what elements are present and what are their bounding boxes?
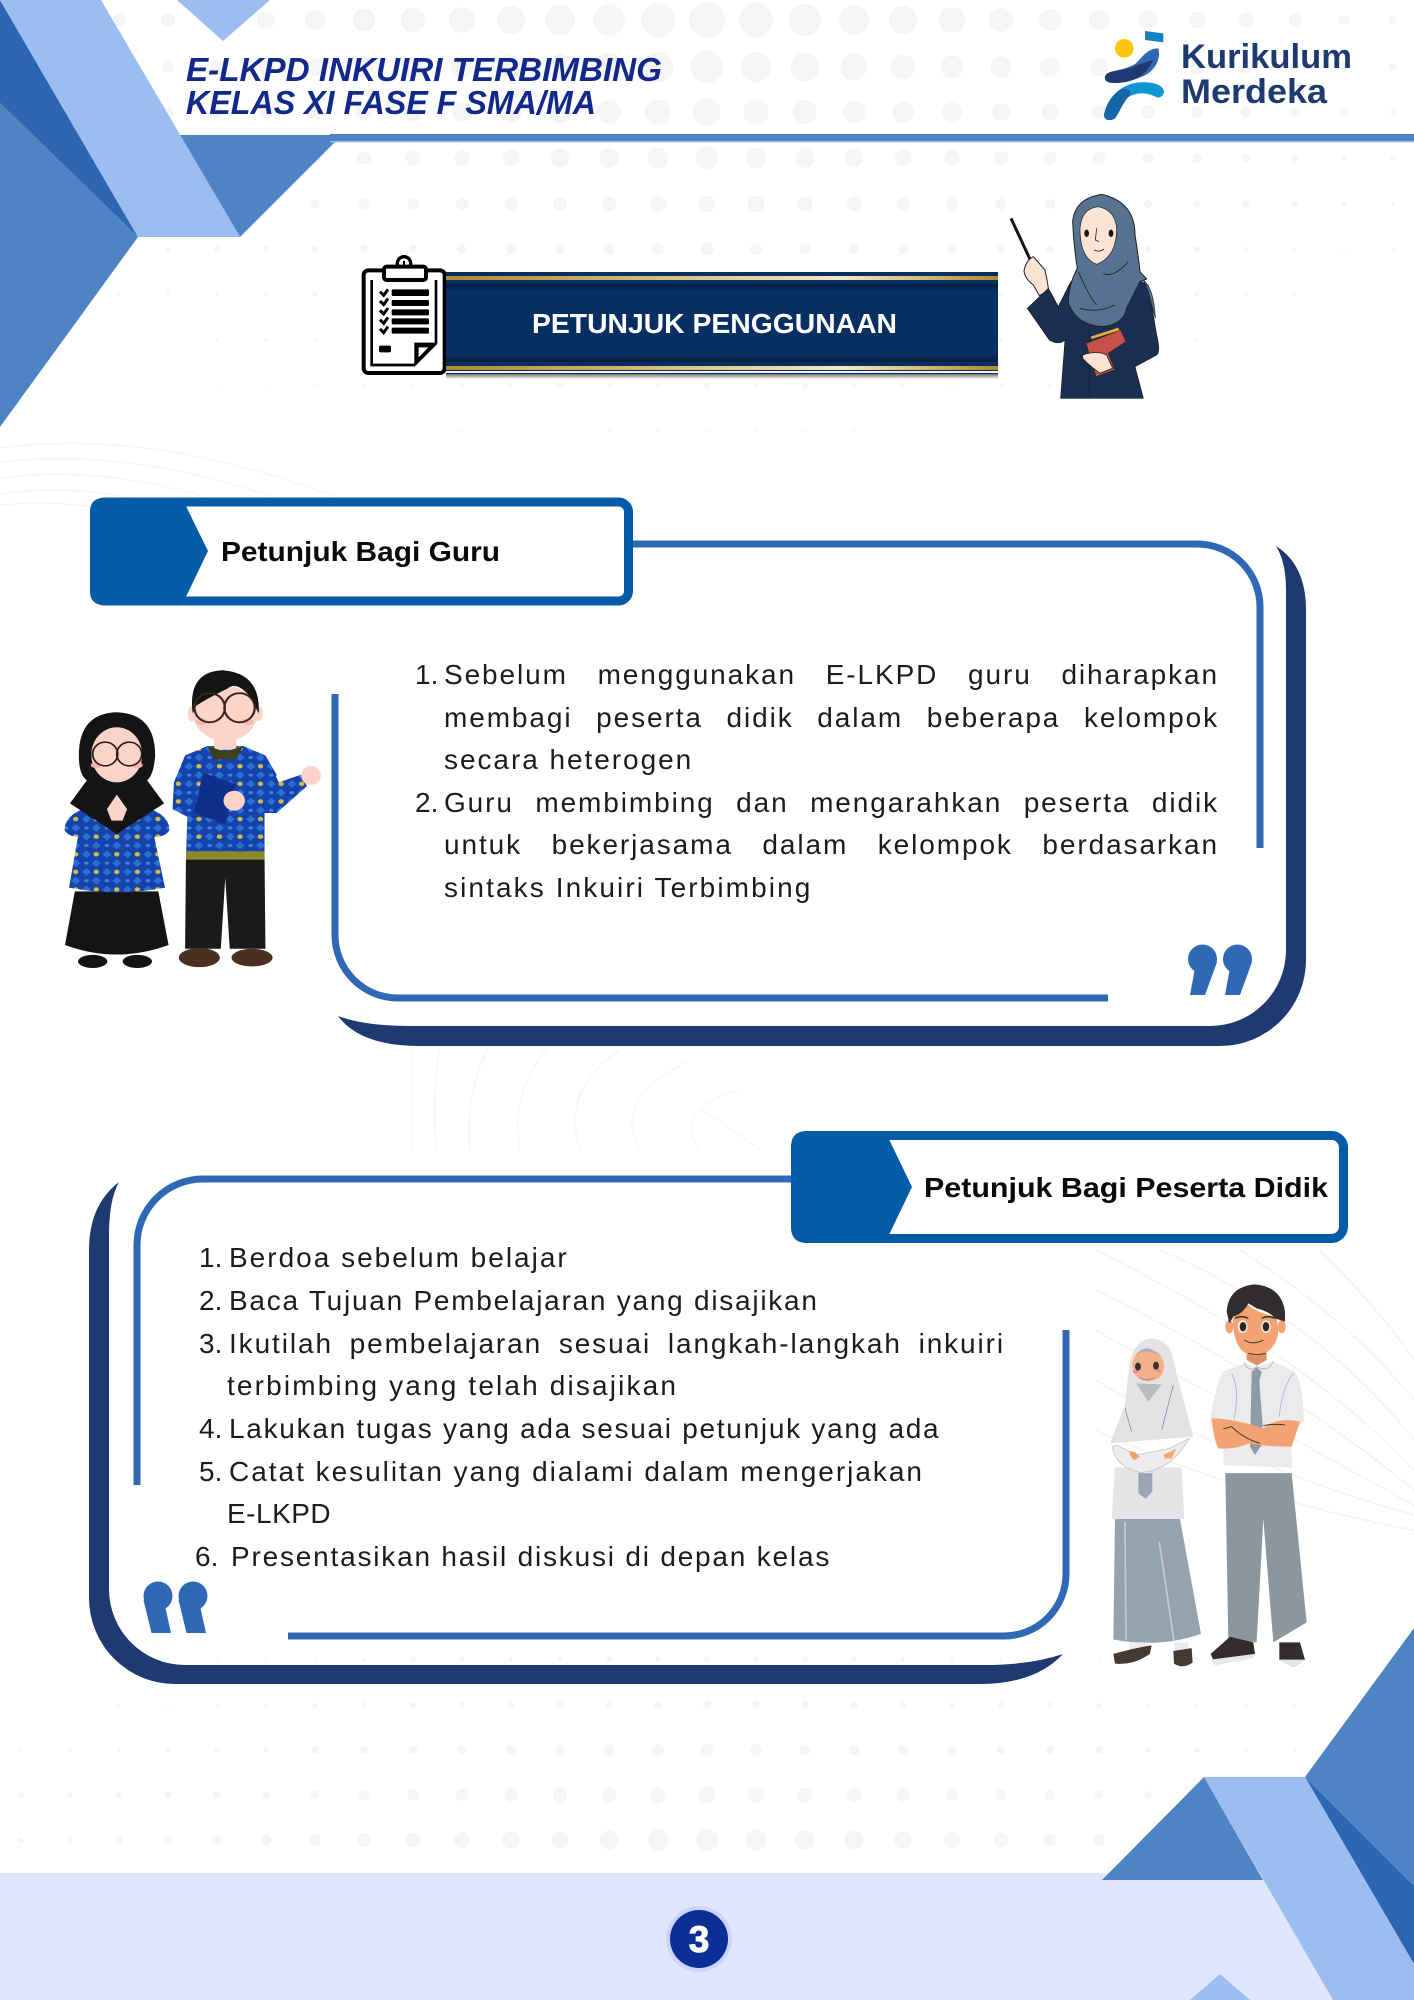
text block: student instructions list: 1. bbox=[199, 1242, 222, 1273]
decorative corner: top-left triangles bbox=[0, 0, 335, 427]
illustration: students in uniform bbox=[1110, 1284, 1307, 1667]
logo: Kurikulum Merdeka: Merdeka bbox=[1181, 73, 1328, 111]
heading: Petunjuk Bagi Guru: Petunjuk Bagi Guru bbox=[221, 536, 500, 567]
logo: Kurikulum Merdeka: Kurikulum bbox=[1181, 38, 1352, 76]
title: KELAS XI FASE F SMA/MA bbox=[186, 84, 596, 121]
text block: student instructions list: terbimbing yang telah disajikan bbox=[227, 1370, 678, 1401]
text block: teacher instructions list: sintaks Inkuiri Terbimbing bbox=[444, 872, 812, 903]
heading: Petunjuk Bagi Peserta Didik: Petunjuk Bagi Peserta Didik bbox=[924, 1172, 1328, 1203]
text block: student instructions list: 6. bbox=[195, 1541, 218, 1572]
text block: student instructions list: E-LKPD bbox=[227, 1498, 331, 1529]
text block: student instructions list: Baca Tujuan Pembelajaran yang disajikan bbox=[229, 1285, 819, 1316]
blue outline bbox=[137, 1179, 1066, 1636]
navy offset shadow bbox=[89, 1182, 1063, 1684]
logo: Kurikulum Merdeka bbox=[1104, 31, 1352, 120]
text block: student instructions list: 3. bbox=[199, 1328, 222, 1359]
closing quote mark bbox=[1188, 944, 1252, 995]
illustration: teachers in batik bbox=[65, 670, 321, 968]
text block: teacher instructions list: Sebelum menggunakan E-LKPD guru diharapkan bbox=[444, 659, 1219, 690]
panel: teacher instructions frame bbox=[335, 544, 1306, 1046]
text block: student instructions list: 2. bbox=[199, 1285, 222, 1316]
navy offset shadow bbox=[338, 546, 1306, 1046]
text block: student instructions list: 4. bbox=[199, 1413, 222, 1444]
text block: student instructions list: Lakukan tugas yang ada sesuai petunjuk yang ada bbox=[229, 1413, 940, 1444]
text block: student instructions list: Ikutilah pembelajaran sesuai langkah-langkah inkuiri bbox=[229, 1328, 1005, 1359]
footer band bbox=[0, 1873, 1414, 2000]
opening quote mark bbox=[144, 1582, 208, 1633]
page number badge bbox=[666, 1906, 732, 1972]
title bbox=[186, 51, 662, 121]
text block: teacher instructions list: secara heterogen bbox=[444, 744, 693, 775]
icon: clipboard checklist bbox=[364, 257, 445, 373]
text block: student instructions list: Presentasikan hasil diskusi di depan kelas bbox=[231, 1541, 831, 1572]
text block: teacher instructions list bbox=[415, 659, 1219, 903]
text block: teacher instructions list: Guru membimbing dan mengarahkan peserta didik bbox=[444, 787, 1219, 818]
text block: teacher instructions list: 1. bbox=[415, 659, 438, 690]
blue outline bbox=[335, 544, 1260, 998]
text block: teacher instructions list: 2. bbox=[415, 787, 438, 818]
heading: Petunjuk Bagi Peserta Didik bbox=[791, 1131, 1344, 1243]
text block: teacher instructions list: membagi peserta didik dalam beberapa kelompok bbox=[444, 702, 1219, 733]
decorative corner: bottom-right triangles bbox=[1102, 1628, 1414, 2000]
title banner: PETUNJUK PENGGUNAAN bbox=[532, 308, 897, 339]
title: E-LKPD INKUIRI TERBIMBING bbox=[186, 51, 662, 88]
title banner bbox=[446, 272, 998, 379]
text block: student instructions list: Catat kesulitan yang dialami dalam mengerjakan bbox=[229, 1456, 924, 1487]
text block: student instructions list: Berdoa sebelum belajar bbox=[229, 1242, 569, 1273]
panel: student instructions frame bbox=[89, 1179, 1066, 1684]
illustration: teacher with pointer bbox=[1011, 194, 1159, 398]
heading: Petunjuk Bagi Guru bbox=[90, 498, 628, 605]
text block: teacher instructions list: untuk bekerjasama dalam kelompok berdasarkan bbox=[444, 829, 1219, 860]
header rule bbox=[330, 134, 1414, 142]
text block: student instructions list bbox=[195, 1242, 1005, 1572]
text block: student instructions list: 5. bbox=[199, 1456, 222, 1487]
page number badge: 3 bbox=[689, 1919, 709, 1960]
